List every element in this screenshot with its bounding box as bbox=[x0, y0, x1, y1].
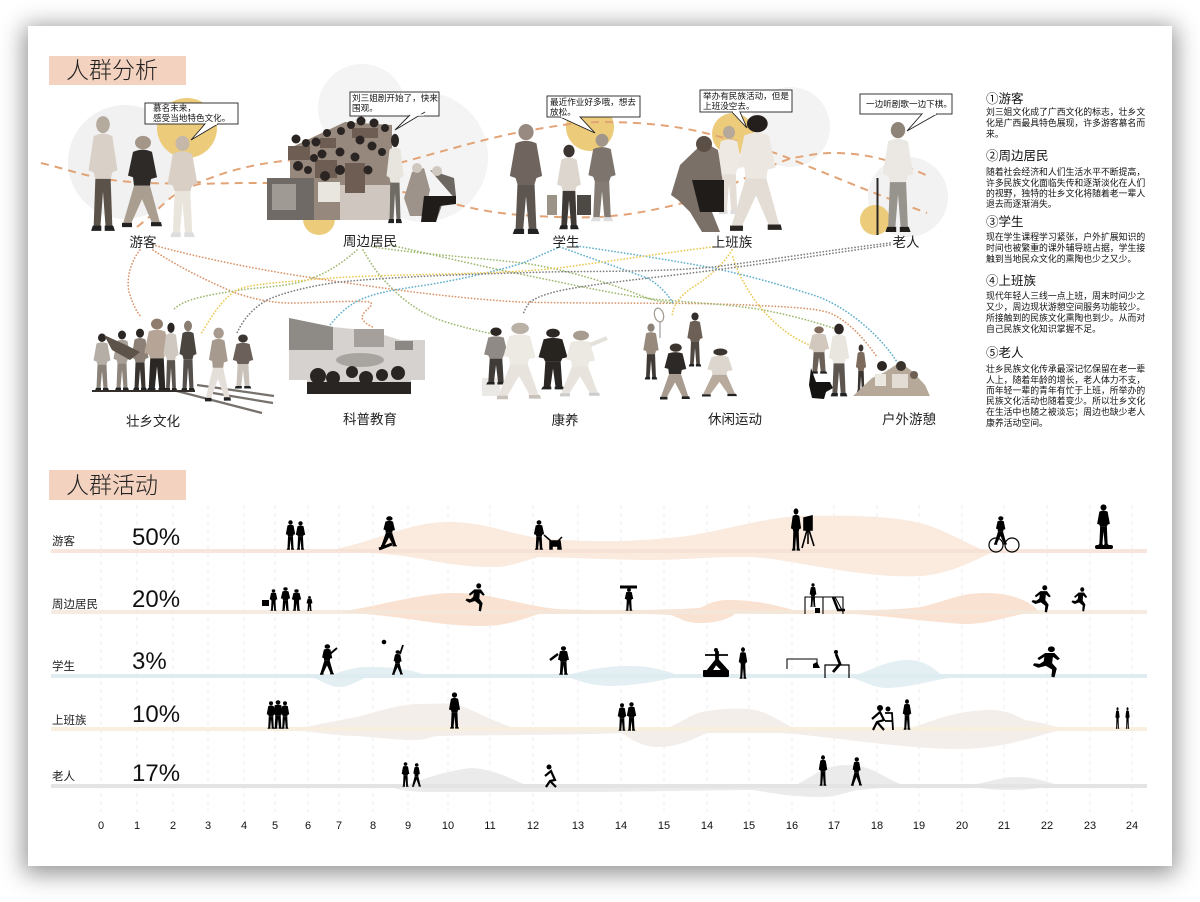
note 3 students: ③学生 bbox=[986, 211, 1024, 230]
photo: elderly man with cane bbox=[876, 122, 913, 235]
row: tourists timeline bbox=[51, 504, 1147, 576]
note 2 residents: 的视野，独特的壮乡文化将随着老一辈人 bbox=[986, 186, 1145, 200]
time line bbox=[51, 674, 1147, 678]
speech bubble: 慕名未来， bbox=[153, 102, 196, 114]
note 5 elderly: 而年轻一辈的青年有忙于上班，所举办的 bbox=[986, 384, 1145, 396]
time axis: 13 bbox=[572, 820, 584, 832]
time axis: 4 bbox=[241, 820, 247, 832]
background circles bbox=[68, 64, 948, 237]
note 1 tourists bbox=[986, 88, 1145, 140]
activity: outdoor recreation bbox=[809, 324, 936, 428]
silhouettes bbox=[262, 583, 1087, 614]
note 1 tourists: 来。 bbox=[986, 127, 1004, 140]
activity area bbox=[339, 593, 1039, 626]
group: students bbox=[510, 96, 640, 251]
note 3 students: 触到当地民众文化的熏陶也少之又少。 bbox=[986, 252, 1136, 265]
silhouettes bbox=[320, 640, 1060, 679]
note 4 workers: 所接触到的民族文化熏陶也到少。从而对 bbox=[986, 311, 1145, 324]
activity area bbox=[386, 765, 1062, 797]
share: 20% bbox=[132, 586, 180, 613]
time axis: 16 bbox=[786, 820, 798, 832]
label: 周边居民 bbox=[343, 230, 397, 250]
note 4 workers: 又少，周边现状游憩空间服务功能较少。 bbox=[986, 300, 1145, 313]
note 5 elderly: 壮乡民族文化传承最深记忆保留在老一辈 bbox=[986, 362, 1145, 375]
row label: 周边居民 bbox=[52, 596, 98, 612]
speech bubble: 围观。 bbox=[352, 102, 378, 114]
note 3 students bbox=[986, 211, 1145, 265]
time axis: 5 bbox=[272, 820, 278, 832]
silhouettes bbox=[267, 692, 1130, 731]
time axis: 23 bbox=[1084, 820, 1096, 832]
share: 17% bbox=[132, 760, 180, 787]
speech bubble: 刘三姐剧开始了，快来 bbox=[352, 92, 438, 104]
time axis: 7 bbox=[336, 820, 342, 832]
speech bubble: 感受当地特色文化。 bbox=[153, 112, 230, 124]
time axis: 14 bbox=[701, 820, 713, 832]
note 4 workers: ④上班族 bbox=[986, 270, 1037, 289]
time axis: 11 bbox=[484, 820, 496, 832]
photo: dancers bbox=[92, 319, 274, 413]
time axis: 12 bbox=[527, 820, 539, 832]
time axis: 20 bbox=[956, 820, 968, 832]
time line bbox=[51, 610, 1147, 614]
note 2 residents bbox=[986, 145, 1145, 210]
speech bubble bbox=[145, 102, 238, 140]
photo: tai chi and seated elders bbox=[482, 323, 607, 399]
note 3 students: 时间也被繁重的课外辅导班占据，学生接 bbox=[986, 241, 1145, 254]
row: elderly timeline bbox=[51, 755, 1147, 797]
note 2 residents: ②周边居民 bbox=[986, 145, 1049, 164]
time axis: 22 bbox=[1041, 820, 1053, 832]
speech bubble bbox=[350, 92, 439, 130]
note 5 elderly: 在生活中也随之被淡忘；周边也缺少老人 bbox=[986, 405, 1145, 418]
row label: 上班族 bbox=[52, 712, 87, 728]
time axis: 24 bbox=[1126, 820, 1138, 832]
speech bubble bbox=[700, 90, 792, 128]
time axis: 15 bbox=[743, 820, 755, 832]
activity: science education bbox=[289, 318, 425, 428]
note 3 students: 现在学生课程学习紧张，户外扩展知识的 bbox=[986, 230, 1145, 243]
time axis: 10 bbox=[442, 820, 454, 832]
heading: crowd activity bbox=[49, 466, 186, 500]
note 5 elderly: 康养活动空间。 bbox=[986, 416, 1048, 429]
heading: crowd analysis: 人群分析 bbox=[66, 51, 158, 85]
time axis bbox=[98, 820, 1138, 832]
label: 学生 bbox=[552, 231, 580, 251]
time line bbox=[51, 784, 1147, 788]
note 1 tourists: ①游客 bbox=[986, 88, 1024, 107]
row: office workers timeline bbox=[51, 692, 1147, 749]
activity area bbox=[328, 516, 993, 576]
activity: Zhuang culture bbox=[92, 319, 274, 430]
photo: exhibition room and audience bbox=[289, 318, 425, 394]
share: 50% bbox=[132, 524, 180, 551]
speech bubble: 上班没空去。 bbox=[703, 100, 755, 112]
note 5 elderly: 民族文化活动也随着变少。所以壮乡文化 bbox=[986, 394, 1145, 407]
dotted connection lines bbox=[128, 243, 897, 362]
note 4 workers: 现代年轻人三线一点上班，周末时间少之 bbox=[986, 289, 1145, 302]
share: 3% bbox=[132, 648, 167, 675]
row label: 游客 bbox=[52, 533, 75, 549]
activity area bbox=[295, 704, 1064, 749]
time axis: 9 bbox=[405, 820, 411, 832]
row: residents timeline bbox=[51, 583, 1147, 626]
note 2 residents: 随着社会经济和人们生活水平不断提高， bbox=[986, 165, 1145, 178]
label: 康养 bbox=[552, 409, 578, 429]
time axis: 19 bbox=[913, 820, 925, 832]
speech bubble: 放松。 bbox=[550, 106, 576, 118]
photo: seated audience bbox=[267, 116, 456, 223]
time axis: 1 bbox=[134, 820, 140, 832]
label: 科普教育 bbox=[343, 408, 397, 428]
activity: leisure sports bbox=[643, 307, 762, 428]
label: 老人 bbox=[892, 231, 920, 251]
speech bubble: 举办有民族活动，但是 bbox=[703, 90, 789, 102]
silhouettes bbox=[286, 504, 1113, 552]
photo: three office workers bbox=[671, 115, 782, 232]
time axis: 17 bbox=[828, 820, 840, 832]
note 1 tourists: 化是广西最具特色展现，许多游客慕名而 bbox=[986, 116, 1145, 129]
time axis: 2 bbox=[170, 820, 176, 832]
photo: racket and ball players bbox=[643, 307, 737, 399]
label: 休闲运动 bbox=[708, 408, 762, 428]
time axis: 8 bbox=[370, 820, 376, 832]
row label: 学生 bbox=[52, 658, 75, 674]
speech bubble bbox=[547, 96, 640, 133]
note 5 elderly bbox=[986, 342, 1145, 429]
time axis: 18 bbox=[871, 820, 883, 832]
group: nearby residents bbox=[267, 92, 456, 250]
silhouettes bbox=[402, 755, 862, 787]
note 2 residents: 退去而逐渐消失。 bbox=[986, 197, 1057, 210]
time axis: 21 bbox=[998, 820, 1010, 832]
label: 游客 bbox=[130, 231, 157, 251]
photo: three tourists bbox=[89, 116, 197, 237]
time axis: 3 bbox=[205, 820, 211, 832]
label: 壮乡文化 bbox=[126, 410, 180, 430]
dashed flow lines bbox=[41, 122, 930, 227]
label: 户外游憩 bbox=[882, 408, 936, 428]
text column: crowd descriptions bbox=[986, 88, 1145, 429]
activity: health care bbox=[482, 323, 607, 429]
heading: crowd activity: 人群活动 bbox=[66, 466, 158, 500]
time axis: 14 bbox=[615, 820, 627, 832]
group: elderly bbox=[860, 94, 952, 251]
note 4 workers: 自己民族文化知识掌握不足。 bbox=[986, 322, 1101, 335]
time axis: 0 bbox=[98, 820, 104, 832]
note 5 elderly: 人上，随着年龄的增长，老人体力不支， bbox=[986, 373, 1145, 386]
speech bubble: 一边听剧歌一边下棋。 bbox=[866, 98, 952, 110]
label: 上班族 bbox=[712, 231, 753, 251]
activity area bbox=[310, 660, 957, 688]
group: office workers bbox=[671, 90, 792, 251]
time axis: 6 bbox=[305, 820, 311, 832]
heading: crowd analysis bbox=[49, 51, 186, 85]
share: 10% bbox=[132, 701, 180, 728]
note 1 tourists: 刘三姐文化成了广西文化的标志，壮乡文 bbox=[986, 105, 1145, 118]
speech bubble: 最近作业好多哦，想去 bbox=[550, 96, 636, 108]
photo: three students bbox=[510, 124, 616, 234]
group: tourists bbox=[89, 102, 238, 251]
photo: family with dog bbox=[809, 324, 930, 399]
note 5 elderly: ⑤老人 bbox=[986, 342, 1024, 361]
time line bbox=[51, 549, 1147, 553]
speech bubble bbox=[860, 94, 952, 131]
row: students timeline bbox=[51, 640, 1147, 688]
time axis: 15 bbox=[658, 820, 670, 832]
time line bbox=[51, 727, 1147, 731]
row label: 老人 bbox=[52, 768, 75, 784]
note 2 residents: 许多民族文化面临失传和逐渐淡化在人们 bbox=[986, 176, 1145, 189]
note 4 workers bbox=[986, 270, 1145, 335]
